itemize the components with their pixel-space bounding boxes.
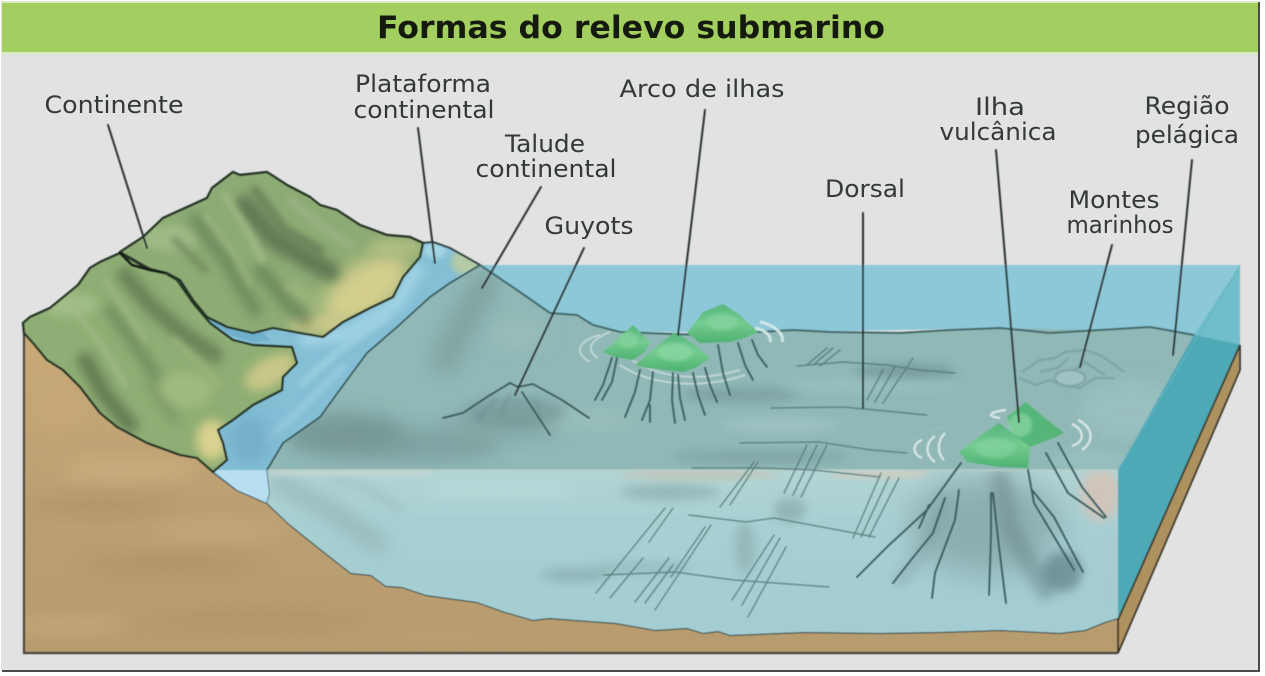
island: back mound	[1007, 402, 1064, 447]
label: Ilha vulcânica: Ilha	[975, 93, 1025, 121]
front water over ocean floor	[267, 469, 1120, 635]
island: front	[635, 332, 710, 372]
ocean ridges: dorsal	[596, 348, 955, 617]
label: Região pelágica	[1135, 92, 1239, 149]
label: Montes marinhos	[1066, 186, 1174, 239]
island: front mound	[959, 423, 1030, 468]
label: Região pelágica: pelágica	[1135, 121, 1239, 149]
leader lines	[108, 110, 1192, 422]
side face of water	[1118, 265, 1240, 622]
island: left	[603, 325, 650, 360]
title bar	[2, 1, 1258, 54]
label: Arco de ilhas: Arco de ilhas	[620, 75, 784, 103]
continent: front mountain	[23, 252, 301, 472]
sand cross-section	[10, 322, 1118, 653]
label: Plataforma continental	[354, 70, 494, 124]
river channel between mountains	[163, 272, 270, 342]
label: Talude continental: Talude	[504, 130, 585, 158]
label: Plataforma continental: Plataforma	[355, 70, 491, 98]
island: back right	[687, 304, 758, 343]
label: Plataforma continental: continental	[354, 96, 494, 124]
volcanic island	[857, 402, 1106, 603]
panel: continental shelf water	[163, 242, 480, 503]
labels	[44, 70, 1239, 240]
label: Talude continental	[476, 130, 616, 183]
label: Ilha vulcânica: vulcânica	[940, 118, 1056, 146]
side face of sand	[1118, 345, 1240, 653]
continent: back mountain	[120, 172, 423, 340]
sea surface back	[480, 265, 1240, 345]
diagram: block of relief	[10, 110, 1240, 653]
label: Dorsal: Dorsal	[825, 175, 905, 203]
ocean floor seen through water	[267, 265, 1240, 470]
label: Talude continental: continental	[476, 155, 616, 183]
label: Guyots: Guyots	[544, 212, 634, 240]
title: Formas do relevo submarino	[377, 10, 885, 46]
label: Ilha vulcânica	[940, 93, 1056, 146]
island arc	[580, 304, 783, 423]
label: Montes marinhos: Montes	[1068, 186, 1160, 214]
label: Continente: Continente	[44, 91, 184, 119]
guyots	[443, 383, 589, 435]
label: Região pelágica: Região	[1144, 92, 1230, 120]
seamounts: montes marinhos	[1020, 350, 1124, 388]
label: Montes marinhos: marinhos	[1066, 211, 1174, 239]
